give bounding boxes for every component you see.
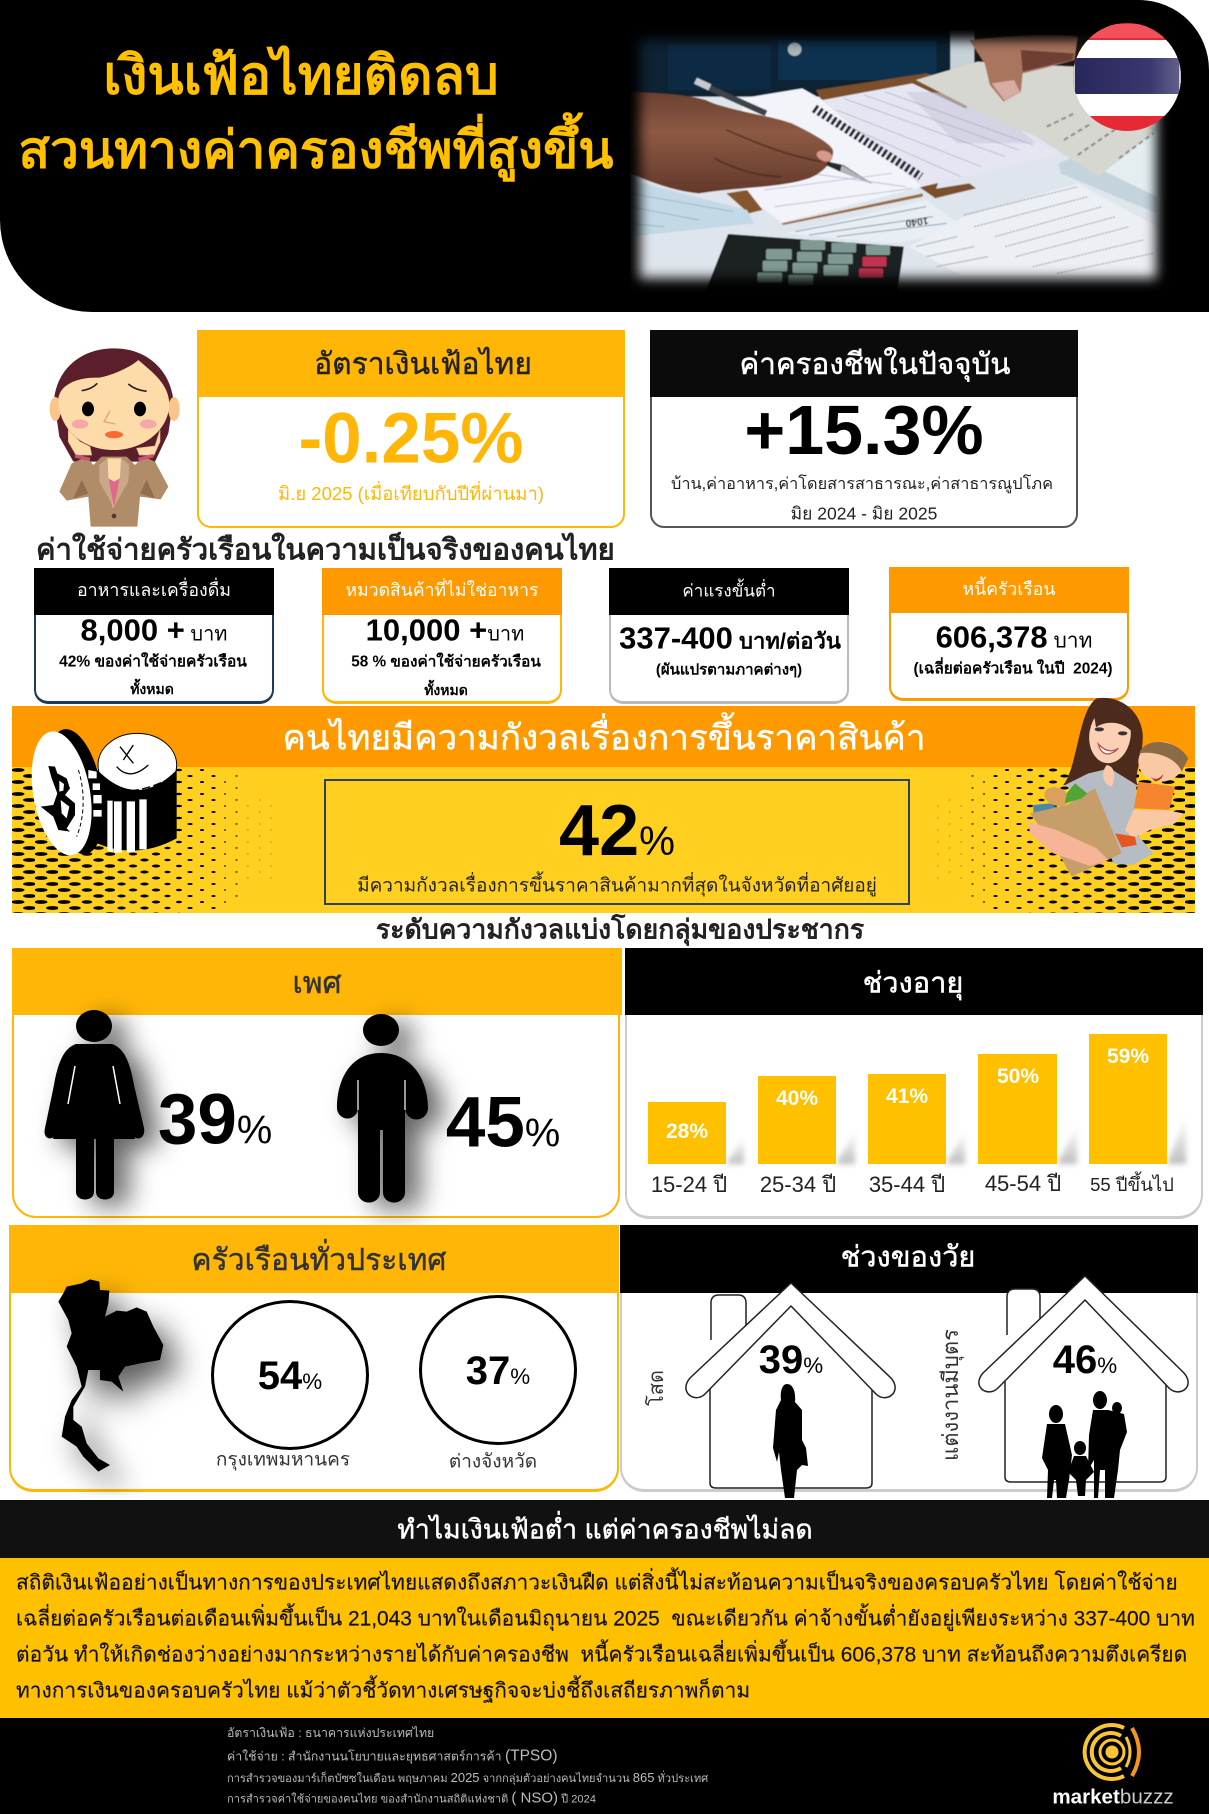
panel: worry about rising prices	[12, 706, 1195, 913]
card header	[609, 568, 849, 615]
heading: why: ทำไมเงินเฟ้อต่ำ แต่ค่าครองชีพไม่ลด	[397, 1515, 813, 1545]
card title: หนี้ครัวเรือน	[963, 579, 1055, 599]
bar chart: worry by age	[648, 1034, 1189, 1168]
sources	[227, 1726, 708, 1806]
axis label: 15-24: 15-24 ปี	[651, 1172, 727, 1197]
value: 10,000 +บาท	[366, 612, 524, 648]
label: married with children: แต่งงานมีบุตร	[938, 1329, 963, 1461]
title	[19, 45, 613, 182]
panel: life stage	[620, 1225, 1198, 1492]
title: เงินเฟ้อไทยติดลบ	[103, 46, 499, 106]
heading: life stage: ช่วงของวัย	[841, 1242, 975, 1274]
panel header	[625, 948, 1203, 1015]
card title: หมวดสินค้าที่ไม่ใช่อาหาร	[346, 580, 538, 600]
bar chart: worry by age: 59%	[1107, 1045, 1149, 1068]
note line 2: ทั้งหมด	[130, 681, 174, 697]
heading: age range: ช่วงอายุ	[863, 968, 963, 1000]
value: 8,000 + บาท	[81, 612, 227, 648]
figure: Bangkok: 54%	[258, 1354, 322, 1398]
panel: Thai inflation rate	[197, 330, 625, 528]
card: household debt	[889, 567, 1129, 701]
panel: explanation text: เฉลี่ยต่อครัวเรือนต่อเดือนเพิ่มขึ้นเป็น 21,043 บาทในเดือนมิถุนายน 2025 ขณะเดียวกัน ค่าจ้างขั้นต่ำยังอยู่เพียงระหว่าง 337-400 บาท	[16, 1608, 1195, 1631]
figure: 42%: 42%	[559, 791, 675, 871]
title: สวนทางค่าครองชีพที่สูงขึ้น	[19, 120, 613, 178]
axis label: 35-44: 35-44 ปี	[869, 1172, 945, 1197]
panel header	[197, 330, 625, 397]
card title: อาหารและเครื่องดื่ม	[77, 580, 231, 600]
value: 606,378 บาท	[936, 620, 1092, 654]
figure: single 39%: 39%	[759, 1338, 823, 1382]
figure: provinces: 37%	[466, 1349, 530, 1393]
note: 58 % ของค่าใช้จ่ายครัวเรือน	[351, 653, 541, 670]
bar chart: worry by age: 28%	[666, 1120, 708, 1143]
icon: house with single woman	[685, 1282, 896, 1498]
icon: house with family	[978, 1275, 1189, 1498]
icon: woman figure	[42, 1001, 176, 1225]
icon: map of Thailand	[56, 1278, 197, 1495]
label: provinces: ต่างจังหวัด	[449, 1452, 537, 1472]
heading: household expenses: ค่าใช้จ่ายครัวเรือนในความเป็นจริงของคนไทย	[36, 534, 615, 566]
panel: explanation text: ทางการเงินของครอบครัวไทย แม้ว่าตัวชี้วัดทางเศรษฐกิจจะบ่งชี้ถึงเสถียรภาพก็ตาม	[16, 1680, 750, 1703]
heading: cost of living: ค่าครองชีพในปัจจุบัน	[739, 348, 1011, 381]
panel header	[12, 948, 622, 1015]
sources: ค่าใช้จ่าย : สำนักงานนโยบายและยุทธศาสตร์การค้า (TPSO)	[227, 1747, 557, 1764]
panel: explanation text	[0, 1558, 1209, 1718]
heading: households: ครัวเรือนทั่วประเทศ	[192, 1244, 446, 1277]
sources: การสำรวจของมาร์เก็ตบัซซในเดือน พฤษภาคม 2025 จากกลุ่มตัวอย่างคนไทยจำนวน 865 ทั่วประเทศ	[227, 1770, 708, 1785]
heading: worry by demographic: ระดับความกังวลแบ่งโดยกลุ่มของประชากร	[376, 915, 864, 945]
panel: households nationwide	[9, 1225, 619, 1492]
bar chart: worry by age: 41%	[886, 1085, 928, 1108]
icon: man figure	[334, 1005, 461, 1225]
panel: age range	[625, 948, 1203, 1219]
panel: explanation text: สถิติเงินเฟ้ออย่างเป็นทางการของประเทศไทยแสดงถึงสภาวะเงินฝืด แต่สิ่งนี้ไม่สะท้อนความเป็นจริงของครอบครัวไทย โดยค่าใช้จ่าย	[16, 1572, 1178, 1595]
axis label: 25-34: 25-34 ปี	[760, 1172, 836, 1197]
card header	[322, 568, 562, 615]
label: single: โสด	[646, 1370, 668, 1406]
axis label: 45-54: 45-54 ปี	[985, 1171, 1061, 1196]
card: food and drink	[34, 568, 274, 704]
header banner	[0, 0, 1209, 312]
figure: men 45%: 45%	[446, 1084, 560, 1162]
band: why cost of living stays high	[0, 1500, 1209, 1558]
figure: married 46%: 46%	[1053, 1338, 1117, 1382]
note: inflation period: มิ.ย 2025 (เมื่อเทียบกับปีที่ผ่านมา)	[278, 483, 544, 504]
callout: 42 percent	[324, 779, 910, 905]
heading: worry about prices: คนไทยมีความกังวลเรื่องการขึ้นราคาสินค้า	[282, 718, 926, 758]
card header	[34, 568, 274, 615]
circle: provinces 37%	[419, 1295, 577, 1445]
sources: อัตราเงินเฟ้อ : ธนาคารแห่งประเทศไทย	[227, 1726, 434, 1740]
note: period: มิย 2024 - มิย 2025	[791, 503, 937, 523]
figure: cost of living change: +15.3%	[744, 391, 984, 469]
figure: women 39%: 39%	[158, 1080, 272, 1160]
header photo: desk with notebook, receipt and calculator: 1040	[904, 214, 929, 228]
icon: mother with baby and grocery bag	[1028, 698, 1188, 876]
axis label: 55+: 55 ปีขึ้นไป	[1090, 1174, 1174, 1195]
circle: Bangkok 54%	[211, 1300, 369, 1450]
callout caption: มีความกังวลเรื่องการขึ้นราคาสินค้ามากที่สุดในจังหวัดที่อาศัยอยู่	[357, 876, 877, 896]
card header	[889, 567, 1129, 613]
label: Bangkok: กรุงเทพมหานคร	[216, 1450, 350, 1470]
orange heading band	[12, 706, 1195, 767]
bar chart: worry by age: 40%	[776, 1087, 818, 1110]
note: (ผันแปรตามภาคต่างๆ)	[656, 662, 802, 678]
card: non-food goods	[322, 568, 562, 704]
panel header	[620, 1225, 1198, 1293]
panel header	[9, 1225, 619, 1293]
bar chart: worry by age: 50%	[997, 1065, 1039, 1088]
note line 2: ทั้งหมด	[424, 682, 468, 698]
heading: inflation: อัตราเงินเฟ้อไทย	[314, 348, 532, 381]
panel: explanation text: ต่อวัน ทำให้เกิดช่องว่างอย่างมากระหว่างรายได้กับค่าครองชีพ หนี้ครัวเรือนเฉลี่ยเพิ่มขึ้นเป็น 606,378 บาท สะท้อนถึงความตึงเครียด	[16, 1644, 1187, 1667]
sources: การสำรวจค่าใช้จ่ายของคนไทย ของสำนักงานสถิติแห่งชาติ ( NSO) ปี 2024	[227, 1789, 596, 1806]
header photo: desk with notebook, receipt and calculator	[630, 30, 1166, 288]
panel: current cost of living	[650, 330, 1078, 528]
heading: gender: เพศ	[292, 967, 342, 1000]
card title: ค่าแรงขั้นต่ำ	[682, 582, 776, 600]
note: 42% ของค่าใช้จ่ายครัวเรือน	[59, 653, 247, 670]
figure: inflation rate: -0.25%	[299, 400, 523, 478]
logo: marketbuzzz	[1052, 1723, 1174, 1809]
footer	[0, 1718, 1209, 1814]
wordmark: marketbuzzz	[1052, 1786, 1174, 1809]
value: 337-400 บาท/ต่อวัน	[619, 620, 841, 656]
icon: worried woman	[50, 348, 180, 527]
icon: Thai flag button	[1073, 23, 1181, 131]
halftone dot pattern	[12, 768, 1195, 913]
card: minimum wage	[609, 568, 849, 704]
panel: gender	[12, 948, 622, 1218]
panel header	[650, 330, 1078, 397]
note: cost categories: บ้าน,ค่าอาหาร,ค่าโดยสารสาธารณะ,ค่าสาธารณูปโภค	[671, 475, 1053, 493]
icon: coin stack	[32, 729, 178, 856]
note: (เฉลี่ยต่อครัวเรือน ในปี 2024)	[913, 660, 1113, 677]
